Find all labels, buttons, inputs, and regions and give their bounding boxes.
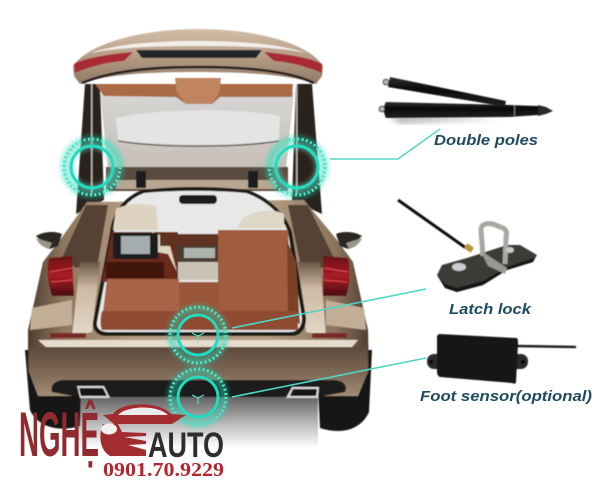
rear mirror bbox=[179, 195, 217, 204]
rear seat dark trim bbox=[106, 262, 164, 278]
connector: latch lock bbox=[232, 289, 426, 328]
label: foot sensor: Foot sensor(optional) bbox=[420, 389, 592, 405]
tailgate struts and pillars bbox=[76, 84, 322, 214]
tail lights bbox=[48, 256, 350, 296]
logo word: NGHE: NGHỆ bbox=[19, 399, 99, 469]
logo word: AUTO: AUTO bbox=[148, 426, 224, 466]
car body bbox=[28, 200, 369, 382]
side highlights bbox=[30, 300, 366, 330]
reflectors bbox=[50, 333, 347, 338]
lower bumper bbox=[29, 347, 368, 396]
exhausts bbox=[77, 386, 319, 398]
target ring: latch bbox=[170, 307, 226, 363]
logo car bbox=[100, 404, 186, 456]
opening side trims bbox=[72, 262, 326, 336]
icon: double poles bbox=[379, 77, 553, 124]
wheels bbox=[25, 350, 372, 431]
connector: double poles bbox=[330, 129, 440, 159]
rear seat left bbox=[102, 232, 178, 282]
label: latch lock: Latch lock bbox=[449, 302, 532, 318]
right headrest bbox=[238, 210, 284, 228]
tailgate inner panel bbox=[95, 78, 294, 191]
icon: latch lock bbox=[398, 200, 537, 292]
connector: foot sensor bbox=[232, 358, 426, 397]
car photo bbox=[25, 29, 372, 448]
icon: foot sensor bbox=[427, 334, 576, 384]
headrest screen bbox=[113, 233, 158, 259]
target ring: foot sensor bbox=[170, 369, 226, 425]
right cargo wall bbox=[287, 240, 300, 325]
target ring: right strut bbox=[269, 139, 325, 195]
center console bbox=[177, 246, 218, 280]
side mirrors bbox=[36, 232, 362, 249]
cargo mat bbox=[103, 279, 179, 312]
target ring: left strut bbox=[64, 139, 120, 195]
diffuser bbox=[52, 380, 346, 397]
window sill bbox=[160, 234, 220, 246]
right upper quarter shade bbox=[288, 205, 334, 268]
label: double poles: Double poles bbox=[434, 133, 538, 149]
right seat bbox=[218, 230, 291, 312]
logo: Nghe Auto bbox=[19, 399, 224, 480]
tailgate lid bbox=[73, 29, 323, 84]
bumper strip bbox=[38, 340, 358, 347]
luggage opening bbox=[93, 187, 306, 336]
left upper quarter shade bbox=[62, 205, 108, 268]
ground reflection bbox=[78, 396, 318, 448]
